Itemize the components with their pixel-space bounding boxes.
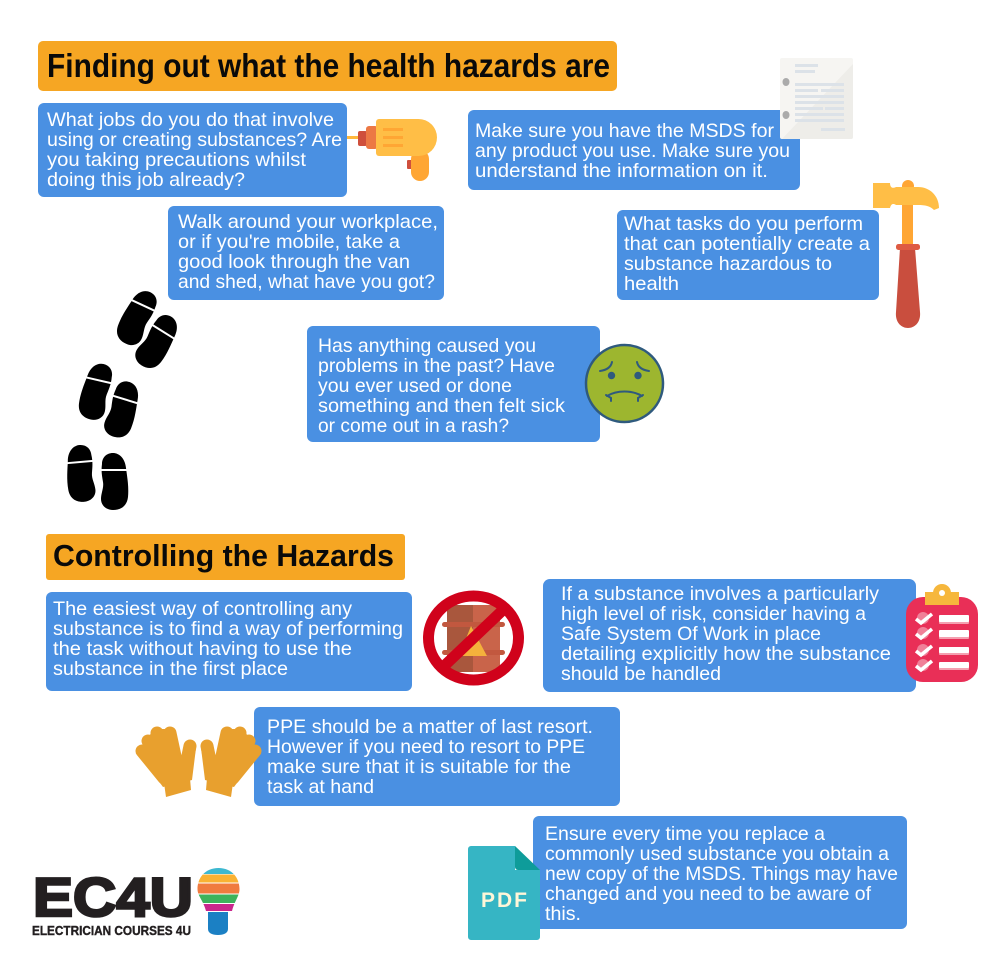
text block: jobs: you taking precautions whilst <box>47 149 307 171</box>
text block: new MSDS: changed and you need to be aware of <box>545 883 872 905</box>
text block: jobs: using or creating substances? Are <box>47 129 342 151</box>
text block: MSDS: Make sure you have the MSDS for <box>475 120 774 142</box>
panel: jobs involving substances <box>38 103 347 197</box>
logo: EC4U Electrician Courses 4U: EC4U <box>33 866 193 928</box>
text block: avoid substance: substance is to find a way of performing <box>53 618 403 640</box>
icon: striped light bulb <box>198 868 240 935</box>
text block: safe system: Safe System Of Work in place <box>561 623 821 645</box>
text block: jobs: What jobs do you do that involve <box>47 109 334 131</box>
panel: avoid using the substance <box>46 592 412 691</box>
panel: tasks creating hazards <box>617 210 879 300</box>
text block: safe system: detailing explicitly how the substance <box>561 643 891 665</box>
text block: MSDS: any product you use. Make sure you <box>475 140 790 162</box>
text block: avoid substance: The easiest way of controlling any <box>53 598 352 620</box>
panel: walk around workplace <box>168 206 444 300</box>
icon: PDF file: PDF <box>481 889 527 912</box>
text block: walk around <box>178 211 438 293</box>
icon: drill <box>347 119 437 181</box>
panel: MSDS <box>468 110 800 190</box>
icon: checklist clipboard <box>906 584 978 682</box>
text block: new MSDS: commonly used substance you obtain a <box>545 843 889 865</box>
text block: MSDS <box>475 120 790 182</box>
text block: tasks: health <box>624 273 679 295</box>
text block: safe system: should be handled <box>561 663 721 685</box>
text block: safe system <box>561 583 891 685</box>
footprint pair: top <box>111 285 186 374</box>
icon: prohibited chemical barrel <box>428 596 518 680</box>
text block: walk around: Walk around your workplace, <box>178 211 438 233</box>
panel: PPE as a last resort <box>254 707 620 806</box>
text block: avoid substance <box>53 598 403 680</box>
text block: safe system: high level of risk, consider having a <box>561 603 866 625</box>
text block: new MSDS <box>545 823 898 925</box>
text block: PPE: make sure that it is suitable for the <box>267 756 571 778</box>
icon: hammer <box>873 180 939 328</box>
text block: avoid substance: the task without having to use the <box>53 638 352 660</box>
text block: past problems: something and then felt sick <box>318 395 565 417</box>
text block: tasks <box>624 213 870 295</box>
text block: new MSDS: Ensure every time you replace a <box>545 823 825 845</box>
text block: PPE: However if you need to resort to PPE <box>267 736 585 758</box>
heading: Controlling the Hazards: Controlling the Hazards <box>53 538 394 573</box>
footprint pair: middle <box>74 360 146 441</box>
text block: past problems: or come out in a rash? <box>318 415 509 437</box>
heading: Finding out what the health hazards are: Finding out what the health hazards are <box>47 47 610 84</box>
text block: past problems: Has anything caused you <box>318 335 536 357</box>
footprint pair: bottom <box>63 444 130 510</box>
text block: past problems: you ever used or done <box>318 375 512 397</box>
icon: safety data sheet document <box>780 58 853 139</box>
text block: MSDS: understand the information on it. <box>475 160 768 182</box>
text block: PPE: PPE should be a matter of last resort. <box>267 716 593 738</box>
right glove <box>201 729 259 797</box>
text block: new MSDS: this. <box>545 903 581 925</box>
text block: past problems: problems in the past? Have <box>318 355 555 377</box>
text block: past problems <box>318 335 565 437</box>
icon: PDF file <box>468 846 540 940</box>
text block: PPE: task at hand <box>267 776 374 798</box>
icon: sick face <box>586 345 663 422</box>
text block: tasks: What tasks do you perform <box>624 213 863 235</box>
text block: tasks: substance hazardous to <box>624 253 832 275</box>
text block: jobs <box>47 109 342 191</box>
text block: jobs: doing this job already? <box>47 169 245 191</box>
text block: walk around: and shed, what have you got? <box>178 271 435 293</box>
text block: avoid substance: substance in the first place <box>53 658 288 680</box>
text block: new MSDS: new copy of the MSDS. Things may have <box>545 863 898 885</box>
panel: replace substance, new MSDS <box>533 816 907 929</box>
heading: Finding out what the health hazards are <box>38 41 617 91</box>
text block: PPE <box>267 716 593 798</box>
panel: past problems <box>307 326 600 442</box>
logo: EC4U Electrician Courses 4U <box>32 866 243 938</box>
logo: EC4U Electrician Courses 4U: ELECTRICIAN COURSES 4U <box>32 923 191 938</box>
icon: footprints <box>63 285 186 510</box>
text block: tasks: that can potentially create a <box>624 233 870 255</box>
text block: safe system: If a substance involves a particularly <box>561 583 879 605</box>
left glove <box>138 729 196 797</box>
text block: walk around: or if you're mobile, take a <box>178 231 400 253</box>
icon: gloves <box>138 729 259 797</box>
text block: walk around: good look through the van <box>178 251 410 273</box>
panel: safe system of work <box>543 579 916 692</box>
